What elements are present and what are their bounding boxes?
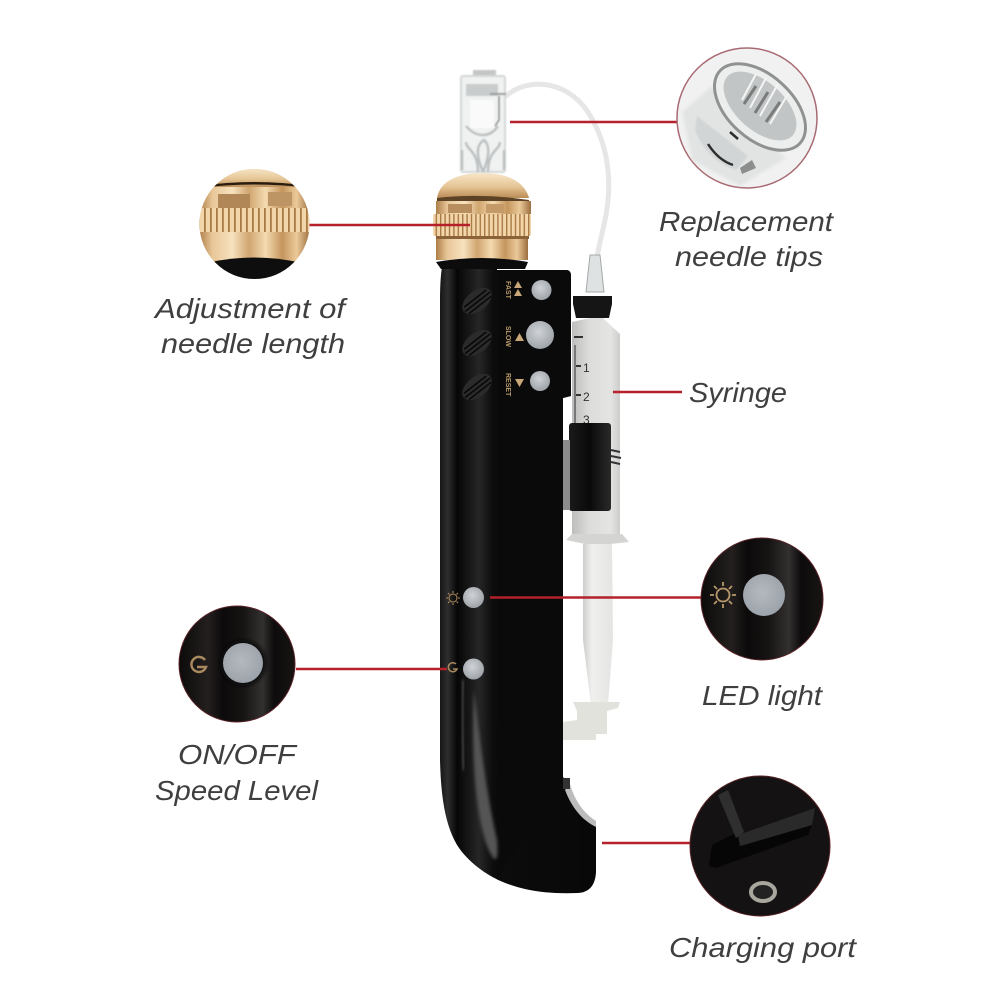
gold adjustment knob [433, 173, 531, 269]
button [223, 643, 263, 683]
LED button [446, 587, 484, 608]
label: syringe: Syringe [689, 377, 787, 408]
label: on/off speed level: Speed Level [155, 775, 319, 806]
detail circle: LED light [701, 538, 823, 660]
needle array [724, 72, 796, 140]
button: slow: SLOW [504, 326, 511, 347]
control panel [497, 270, 571, 880]
pen body [440, 262, 596, 893]
grip 2 [457, 325, 497, 361]
cap [573, 296, 612, 318]
cup body [682, 86, 786, 186]
clamp [569, 423, 611, 511]
plunger [583, 544, 613, 705]
window [695, 116, 748, 170]
scale [574, 336, 590, 430]
red leader lines [296, 122, 703, 843]
cup rim [713, 62, 807, 152]
tube [505, 84, 609, 270]
label: charging port: Charging port [669, 932, 857, 963]
label: replacement needle tips: Replacement [659, 206, 834, 237]
syringe [505, 84, 629, 740]
label: LED light: LED light [702, 680, 823, 711]
body highlight [473, 690, 497, 859]
power button [448, 658, 484, 680]
detail circle: replacement needle tips [677, 47, 822, 188]
scale: 3 [583, 413, 590, 427]
scale: 2 [583, 390, 590, 404]
button: fast: FAST [504, 281, 511, 300]
grip 1 [457, 283, 497, 319]
barrel [572, 318, 620, 536]
detail circle: charging port [690, 776, 830, 916]
connector [586, 255, 604, 292]
detail circle: adjustment of needle length [199, 168, 310, 280]
grip 3 [457, 369, 497, 405]
label: replacement needle tips: needle tips [675, 241, 823, 272]
label: adjustment of needle length: needle length [161, 328, 345, 359]
label: on/off speed level [155, 739, 319, 806]
clear needle tip [461, 70, 506, 172]
port [751, 883, 775, 901]
button [743, 574, 785, 616]
handle [440, 262, 596, 893]
label: replacement needle tips [659, 206, 834, 272]
slots [708, 132, 738, 165]
scale: 1 [583, 361, 590, 375]
spring [611, 450, 621, 464]
label: adjustment of needle length: Adjustment of [153, 293, 349, 324]
detail circle: on/off [179, 606, 295, 722]
plunger head [563, 702, 620, 740]
button halo [220, 640, 266, 686]
button: reset [504, 371, 550, 397]
label: adjustment of needle length [153, 293, 349, 359]
power glyph [191, 657, 206, 672]
sun glyph [716, 588, 730, 602]
flange [566, 534, 629, 544]
arm [561, 440, 570, 510]
button: fast [504, 280, 552, 300]
label: on/off speed level: ON/OFF [178, 739, 298, 770]
button: slow [504, 321, 554, 349]
notch highlight [565, 784, 596, 827]
button: reset: RESET [504, 373, 511, 397]
